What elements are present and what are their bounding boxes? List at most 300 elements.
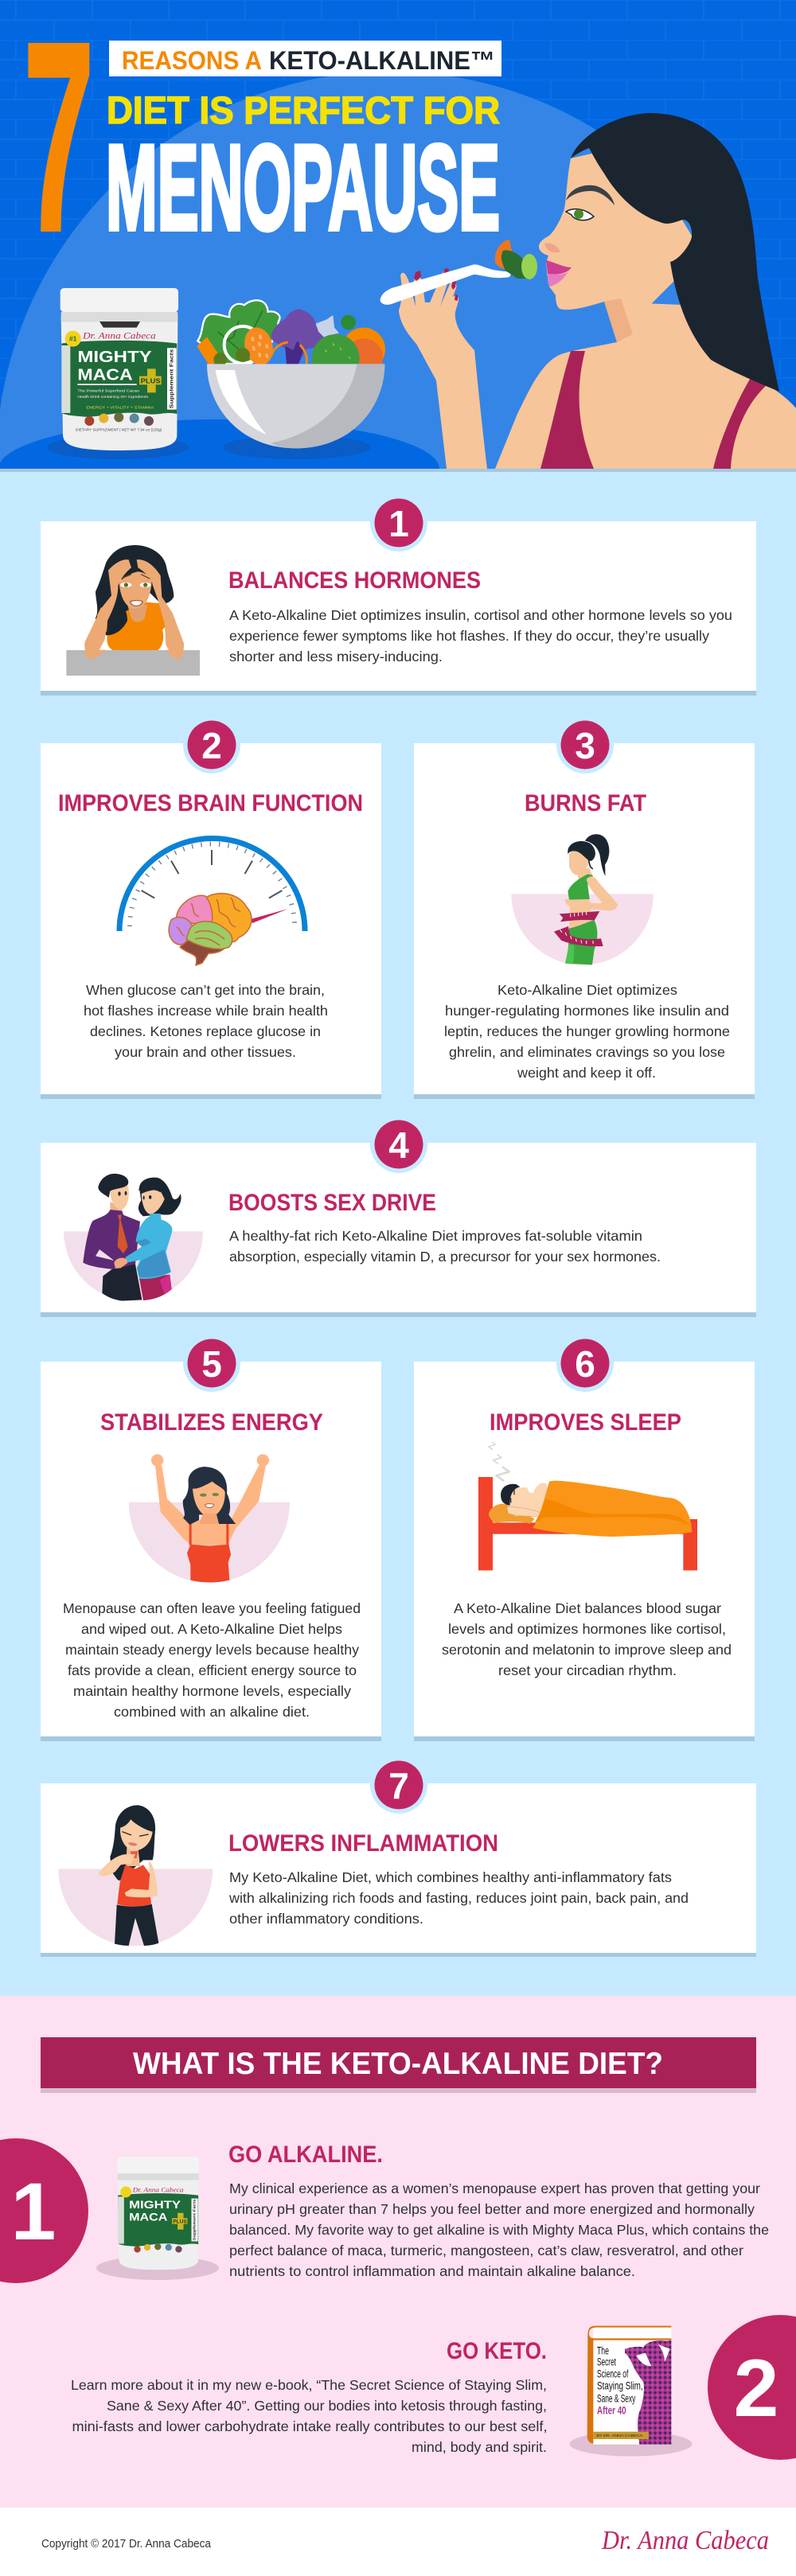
sleeper hair [501,1484,520,1506]
supplement panel: Supplement Facts [169,349,174,408]
heading: GO ALKALINE. [228,2141,383,2168]
desk [66,650,200,676]
label green [118,2193,198,2247]
mouth [130,600,142,606]
body [495,302,796,469]
card panel [41,521,756,691]
tank top right strap [713,376,767,469]
body text: Sane & Sexy After 40”. Getting our bodies into ketosis through fasting, [107,2398,547,2414]
body text [229,2180,769,2279]
body text: Keto-Alkaline Diet optimizes [498,982,677,998]
label benefits: ENERGY + VITALITY + STAMINA [86,405,154,409]
bowl highlight [216,370,267,435]
badge 5 [179,1333,244,1392]
blanket [533,1481,692,1537]
bangs [119,1816,153,1832]
jar lid [117,2157,199,2173]
big circle 1 [0,2138,88,2283]
card 6 [414,1333,755,1741]
woman bangs [139,1178,162,1192]
top tab [100,322,140,328]
heading: IMPROVES BRAIN FUNCTION [58,790,363,816]
body text: reset your circadian rhythm. [498,1662,677,1678]
big circle 1: 1 [11,2166,56,2257]
nostril [544,243,560,253]
eyebrow [566,185,615,205]
broccoli stem [285,341,304,364]
book title: Science of [597,2368,628,2379]
brick wall [0,0,796,399]
book plate [570,2432,693,2456]
plus cross: PLUS [173,2219,187,2224]
closed eyes [122,1832,149,1836]
major ticks [142,850,282,898]
supplement panel: Supplement Facts [193,2199,197,2241]
right arm [137,559,184,660]
body text: and wiped out. A Keto-Alkaline Diet helps [81,1621,342,1637]
illustration: tired woman arms raised [129,1454,290,1583]
leaf [197,300,279,364]
book title: Secret [597,2356,616,2368]
body text [442,1600,732,1678]
jar body [118,2176,199,2270]
card shadow [414,1366,755,1741]
zzz: Z [492,1462,513,1486]
neck [127,605,147,622]
heading: BALANCES HORMONES [228,567,481,594]
orange pepper ring [272,342,306,364]
book title [597,2344,643,2404]
upper lip [546,260,572,275]
illustration: couple [64,1174,203,1301]
lower tape [554,926,603,946]
badge 1: 1 [388,503,409,544]
badge 4: 4 [388,1124,409,1166]
woman eating [380,113,796,469]
neck shadow [604,298,633,342]
badge 2: 2 [201,725,222,766]
brain gauge [119,839,305,965]
body text: A Keto-Alkaline Diet balances blood sugar [454,1600,721,1616]
book title: The [597,2344,609,2356]
right fist [257,1454,269,1467]
step 1: go alkaline [0,2138,769,2283]
card shadow [41,1146,756,1317]
body text [63,1600,361,1720]
eye [566,209,594,220]
heading: BURNS FAT [525,790,646,816]
body text: absorption, especially vitamin D, a precursor for your sex hormones. [229,1249,661,1265]
MACA: MACA [77,366,133,384]
pale leaf [316,315,339,337]
badge 7 [366,1755,431,1814]
green bra [568,874,593,900]
book after 40: After 40 [597,2404,626,2416]
white ring [223,325,254,363]
hair back [110,1805,155,1880]
body text: shorter and less misery-inducing. [229,649,443,664]
body text: with alkalinizing rich foods and fasting, reduces joint pain, back pain, and [228,1890,689,1906]
hair lock [106,597,127,635]
face [119,571,152,609]
gauge arc [119,839,305,931]
cucumber [312,334,360,382]
body text: urinary pH greater than 7 helps you feel better and more energized and hormonally [229,2201,755,2217]
arms over desk [85,650,184,660]
body text: My Keto-Alkaline Diet, which combines healthy anti-inflammatory fats [229,1869,672,1885]
body text: leptin, reduces the hunger growling hormone [444,1023,730,1039]
ponytail [585,834,609,876]
man eyes [118,1191,127,1196]
pants [565,921,597,965]
small peas [213,348,250,366]
leaf veins [217,310,263,358]
card 4 [41,1114,756,1317]
woman skirt [139,1275,172,1300]
needle [251,909,288,923]
table ellipse [0,419,439,469]
upper tape [560,911,599,922]
card 1 [41,493,756,696]
bowl shade [271,364,384,448]
heading: STABILIZES ENERGY [100,1409,323,1436]
eyes [120,583,151,587]
light blue arch [0,76,777,469]
straps [189,1524,228,1545]
face [120,1818,153,1851]
hair strand [587,854,593,869]
copyright: Copyright © 2017 Dr. Anna Cabeca [41,2537,212,2551]
body text [71,2377,548,2455]
illustration: waist measure [511,834,654,965]
supplement panel [192,2199,198,2241]
heading: LOWERS INFLAMMATION [228,1830,498,1857]
woman face [142,1190,165,1214]
banner bar [41,2037,756,2088]
chest [189,1520,231,1545]
body text: Learn more about it in my new e-book, “The Secret Science of Staying Slim, [71,2377,547,2393]
book author band [593,2432,649,2439]
brows [122,575,150,579]
card shadow [41,525,756,696]
man neck [110,1202,122,1212]
title line 1: KETO-ALKALINE™ [269,46,495,75]
tank top left strap [540,351,594,469]
badge 6 [552,1333,618,1392]
right arm [228,1466,266,1544]
tomato [341,328,385,371]
jar body [61,316,178,450]
book title: Staying Slim, [597,2379,643,2391]
banner: what is the keto-alkaline diet [41,2037,756,2093]
body text: hunger-regulating hormones like insulin and [445,1003,729,1019]
badge 3: 3 [575,725,595,766]
pink half circle [58,1869,213,1946]
illustration: sleeping in bed [478,1440,697,1570]
badge 4 [366,1114,431,1173]
body text: ghrelin, and eliminates cravings so you lose [449,1044,725,1060]
body text: fats provide a clean, efficient energy source to [68,1662,357,1678]
body text [229,1228,661,1265]
card shadow [41,1366,381,1741]
plus cross [172,2213,187,2230]
badge 2 [179,715,244,774]
waist arm [125,1861,158,1897]
folds [177,898,240,945]
card shadow [414,748,755,1099]
silhouette dots [625,2340,671,2445]
heading: IMPROVES SLEEP [490,1409,681,1436]
card panel [41,743,381,1094]
throat [130,1851,138,1858]
small jar [117,2157,199,2270]
hair [571,113,779,392]
body text: maintain healthy hormone levels, especially [73,1683,351,1699]
pillow [489,1504,535,1523]
raised arm [99,1854,135,1876]
body text [229,607,732,664]
banner shadow [41,2041,756,2093]
label copy: The Powerful Superfood Cacao [77,389,139,394]
side panel [61,345,70,413]
man shirt [83,1210,140,1269]
corn [240,324,277,368]
bowl shadow [223,435,371,459]
pink half circle [511,894,654,965]
zzz: Z [486,1440,498,1452]
card panel [414,1362,755,1736]
Mighty Maca jar [60,288,178,450]
MIGHTY: MIGHTY [129,2198,181,2211]
supplement panel [167,348,177,410]
body text: perfect balance of maca, turmeric, mangosteen, cat’s claw, resveratrol, and other [229,2243,743,2258]
body text: My clinical experience as a women’s menopause expert has proven that getting your [229,2180,760,2196]
big circle 2: 2 [734,2343,778,2434]
card 2 [41,715,381,1099]
body text: hot flashes increase while brain health [84,1003,328,1019]
hair [183,1467,236,1525]
body text: other inflammatory conditions. [229,1911,423,1927]
body text: When glucose can’t get into the brain, [86,982,325,998]
body text [84,982,328,1060]
hero blue background [0,0,796,410]
arms and hands [84,559,131,659]
body text: levels and optimizes hormones like cortisol, [448,1621,726,1637]
badge 1 [366,493,431,551]
body text: combined with an alkaline diet. [114,1704,310,1720]
footboard [683,1519,697,1570]
card shadow [41,748,381,1099]
body text: your brain and other tissues. [115,1044,296,1060]
book cover [593,2326,671,2445]
badge 6: 6 [575,1343,595,1385]
body text: declines. Ketones replace glucose in [90,1023,321,1039]
body text: mind, body and spirit. [412,2439,547,2455]
MIGHTY: MIGHTY [77,349,152,366]
card 3 [414,715,755,1099]
skirt highlight [160,1275,172,1295]
irises [124,583,147,587]
card panel [41,1783,756,1953]
label copy: Health Drink containing 40+ ingredients [77,395,149,399]
title line 2: DIET IS PERFECT FOR [107,90,500,132]
body text: maintain steady energy levels because healthy [65,1642,359,1658]
flavour dots [134,2243,182,2253]
pink half circle [129,1502,290,1583]
body text: weight and keep it off. [517,1065,656,1081]
badge 7: 7 [388,1765,409,1806]
heading: BOOSTS SEX DRIVE [228,1190,436,1216]
zzz [486,1440,513,1486]
badge 5: 5 [201,1343,222,1385]
body text [228,1869,689,1927]
MACA: MACA [129,2210,167,2223]
pink half circle [64,1231,203,1301]
body text: experience fewer symptoms like hot flashes. If they do occur, they’re usually [229,628,709,644]
seal [120,2187,131,2197]
brand script: Dr. Anna Cabeca [82,330,156,341]
title line 1: REASONS A [122,46,262,75]
book title: Sane & Sexy [597,2392,635,2404]
jar shadow [47,439,189,459]
hands [114,1258,127,1269]
jar lid [60,288,178,312]
hair back [96,545,174,635]
closed eyes [511,1489,514,1502]
torso [569,900,591,929]
headboard [478,1477,493,1570]
face [539,153,693,310]
flavour dots [84,412,154,426]
badge 3 [552,715,618,774]
illustration: stressed woman [66,545,200,676]
face [569,851,589,875]
sweater shade [136,1239,170,1277]
brain [169,894,252,965]
book spine [587,2326,671,2444]
body text: A healthy-fat rich Keto-Alkaline Diet improves fat-soluble vitamin [229,1228,642,1244]
red top [117,1865,151,1907]
woman eyes [143,1195,151,1199]
left arm [155,1466,189,1544]
man face [110,1186,129,1210]
zzz: Z [490,1452,504,1467]
book author band: BY DR. ANNA CABECA [596,2434,643,2438]
big circle 2 [708,2315,796,2460]
minor ticks [130,844,295,926]
iris [574,209,583,219]
pants shade [565,945,575,965]
plus cross [139,368,162,392]
side panel [118,2196,124,2243]
temporal lobe [186,922,232,949]
face [505,1487,529,1507]
body text: mini-fasts and lower carbohydrate intake really contributes to our best self, [72,2418,548,2434]
seal: #1 [69,335,77,343]
arm gap [636,2344,670,2366]
title white box [109,41,501,76]
neck [199,1514,219,1524]
body text: serotonin and melatonin to improve sleep and [442,1642,732,1658]
red top [187,1545,231,1582]
woman hair back [139,1178,181,1216]
fork [380,264,512,305]
net weight: DIETARY SUPPLEMENT | NET WT 7.94 oz (225g) [76,428,162,432]
nails [414,268,458,301]
e-book [587,2326,671,2445]
card panel [414,743,755,1094]
tomato flesh [348,338,383,364]
salad bowl [197,300,385,448]
heading: GO KETO. [447,2338,547,2364]
plus cross: PLUS [141,377,161,385]
eyes [200,1493,219,1497]
hero bottom band [0,469,796,472]
illustration: woman in pain [58,1805,213,1946]
banner title: WHAT IS THE KETO-ALKALINE DIET? [133,2047,663,2081]
label copy [77,389,149,399]
salad bite [495,240,537,279]
purple broccoli [271,309,323,364]
signature: Dr. Anna Cabeca [601,2526,769,2555]
carrot [197,337,217,364]
bowl body [207,364,384,448]
face [193,1482,225,1517]
left fist [151,1454,163,1467]
lower lip [548,272,568,286]
blanket fold [535,1498,692,1528]
body text: Menopause can often leave you feeling fatigued [63,1600,361,1616]
jar plate [96,2256,219,2280]
rail [493,1522,683,1534]
tie [118,1215,128,1253]
hair top [568,841,595,861]
parietal lobe [177,895,213,925]
seal [65,331,81,347]
bangs [119,567,146,579]
silhouette [625,2340,671,2445]
mouth [128,1842,138,1846]
tape ticks [560,912,593,944]
man pants [102,1264,142,1301]
body text: nutrients to control inflammation and maintain alkaline balance. [229,2263,635,2279]
hand and forearm [399,270,487,469]
arm [565,876,618,910]
brainstem [180,931,229,965]
arm [507,1506,541,1518]
body [507,1483,549,1516]
mouth [205,1504,214,1508]
woman sweater [125,1214,172,1279]
jar neck [118,2173,199,2180]
brand script: Dr. Anna Cabeca [132,2187,184,2194]
footer [41,2526,769,2555]
label rule [77,384,137,385]
card panel [41,1143,756,1312]
label green [61,341,177,417]
body text: A Keto-Alkaline Diet optimizes insulin, cortisol and other hormone levels so you [229,607,732,623]
card shadow [41,1787,756,1957]
frontal lobe [205,894,252,942]
body text: balanced. My favorite way to get alkaline is with Mighty Maca Plus, which contains the [229,2222,769,2238]
arm gap [96,1249,114,1261]
card panel [41,1362,381,1736]
orange top [97,602,173,650]
occipital lobe [169,918,193,945]
man hair [98,1174,128,1198]
card 5 [41,1333,381,1741]
neck and shoulders [577,867,593,879]
